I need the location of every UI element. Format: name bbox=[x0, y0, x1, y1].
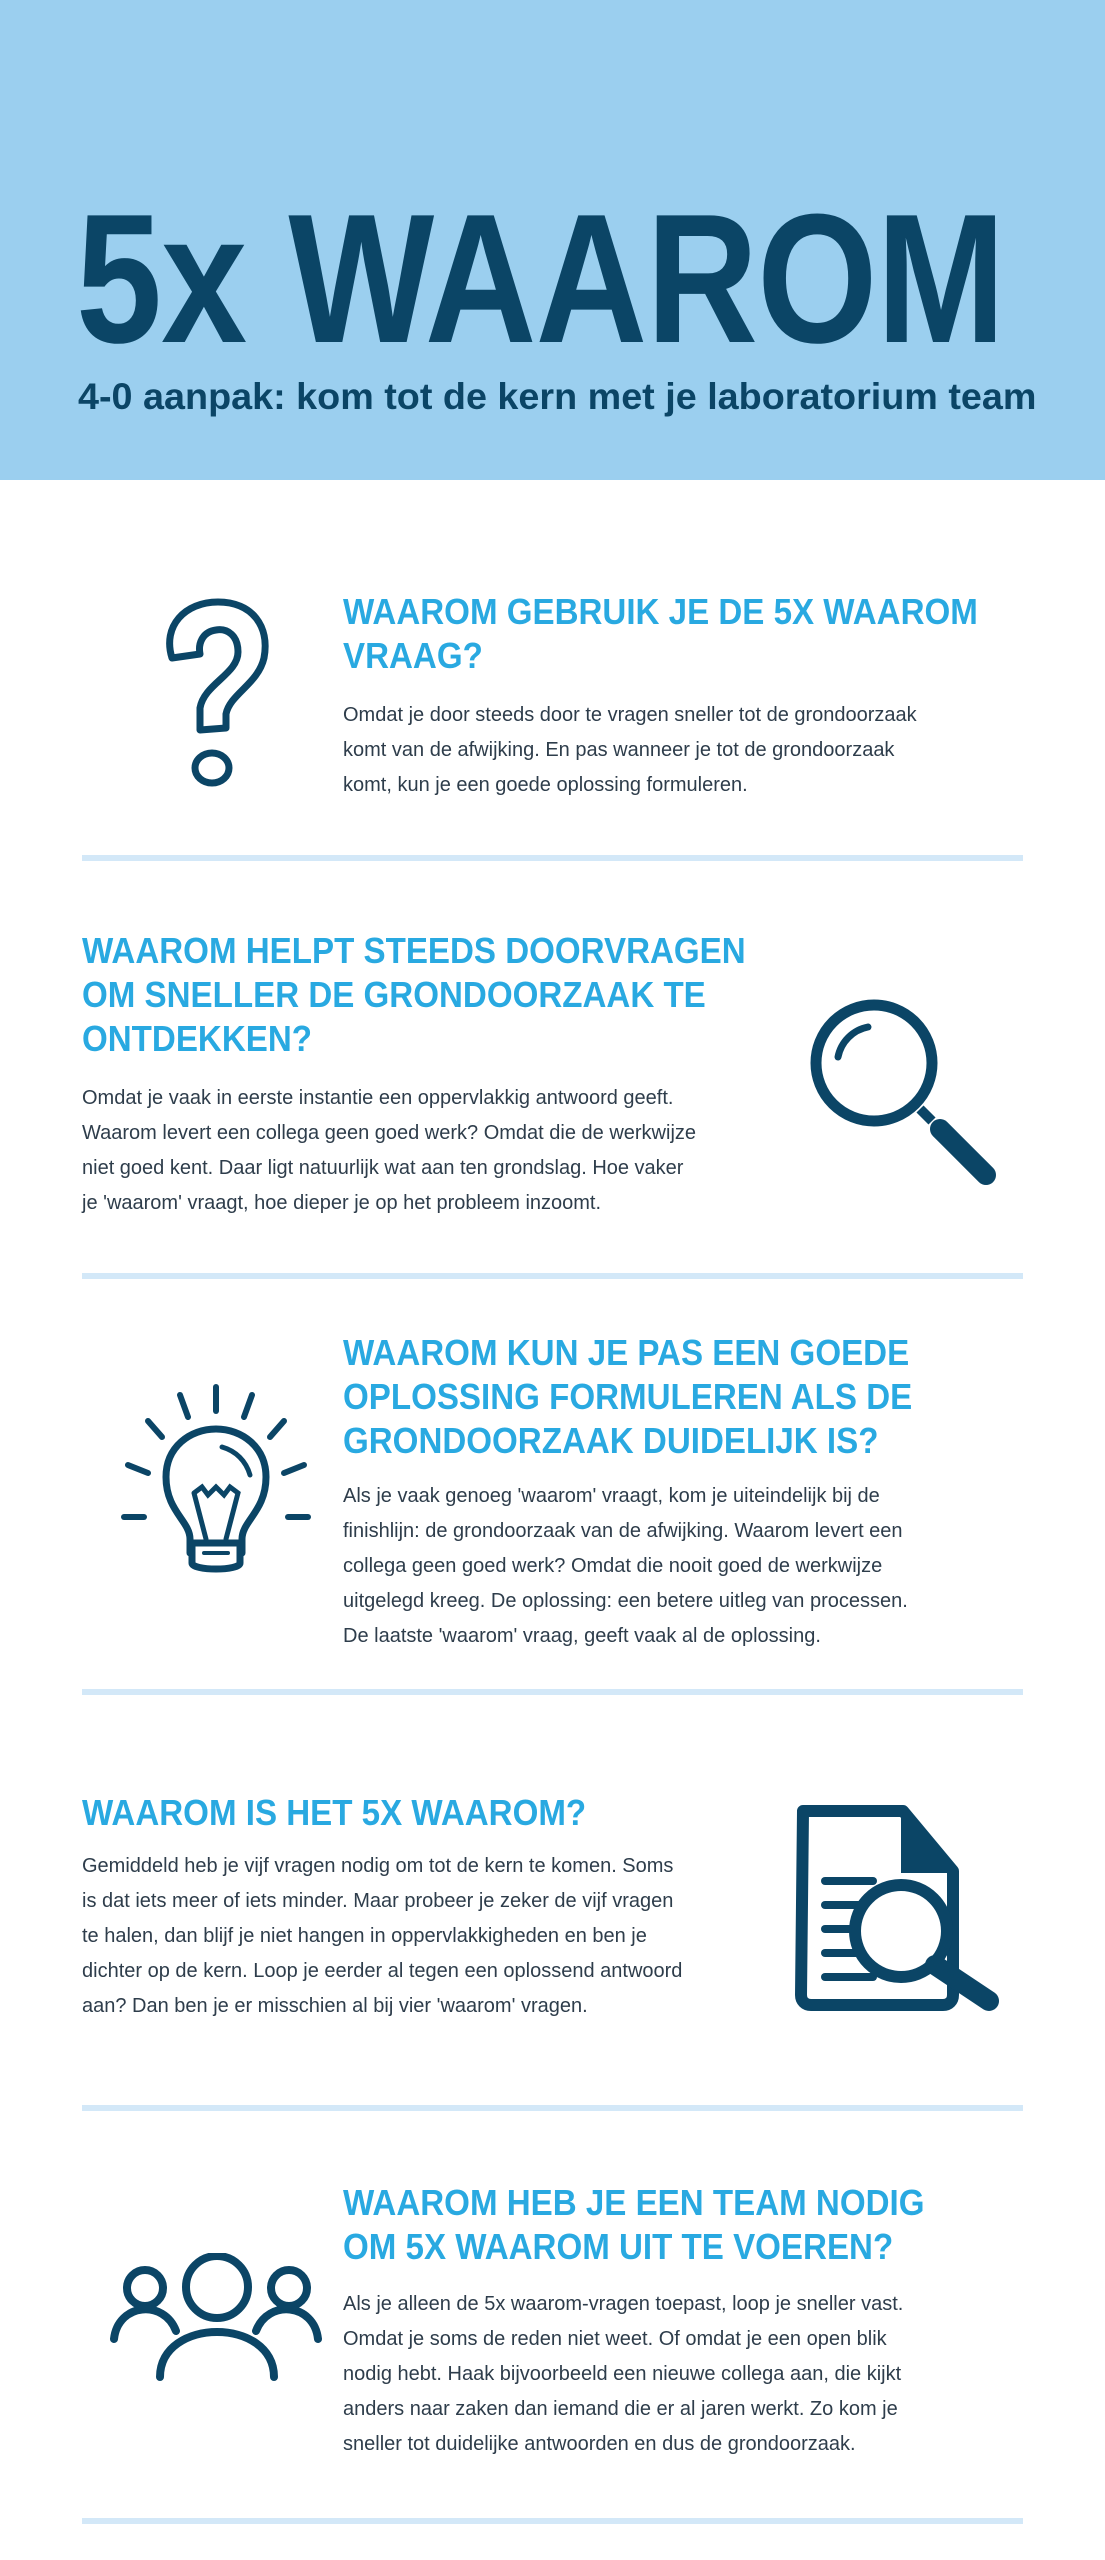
heading: VRAAG? bbox=[343, 635, 483, 676]
heading: OM 5X WAAROM UIT TE VOEREN? bbox=[343, 2226, 893, 2267]
text: Waarom levert een collega geen goed werk? Omdat die de werkwijze bbox=[82, 1122, 696, 1144]
text: dichter op de kern. Loop je eerder al tegen een oplossend antwoord bbox=[82, 1960, 682, 1982]
text bbox=[343, 704, 917, 796]
text: je 'waarom' vraagt, hoe dieper je op het probleem inzoomt. bbox=[82, 1192, 601, 1214]
heading: OPLOSSING FORMULEREN ALS DE bbox=[343, 1376, 912, 1417]
icon: team bbox=[110, 2253, 322, 2381]
heading bbox=[343, 1332, 912, 1461]
heading: WAAROM IS HET 5X WAAROM? bbox=[82, 1792, 586, 1833]
subtitle: 4-0 aanpak: kom tot de kern met je laboratorium team bbox=[78, 376, 1036, 417]
text: De laatste 'waarom' vraag, geeft vaak al de oplossing. bbox=[343, 1625, 821, 1647]
header banner bbox=[0, 0, 1105, 480]
heading bbox=[343, 2182, 924, 2267]
panel: section 4 bbox=[82, 1792, 999, 2017]
text: Omdat je door steeds door te vragen sneller tot de grondoorzaak bbox=[343, 704, 917, 726]
text: finishlijn: de grondoorzaak van de afwijking. Waarom levert een bbox=[343, 1520, 903, 1542]
text: Omdat je soms de reden niet weet. Of omdat je een open blik bbox=[343, 2328, 887, 2350]
heading: OM SNELLER DE GRONDOORZAAK TE bbox=[82, 974, 706, 1015]
icon: document with magnifier bbox=[795, 1805, 999, 2011]
icon: light bulb bbox=[121, 1384, 311, 1572]
text: komt van de afwijking. En pas wanneer je tot de grondoorzaak bbox=[343, 739, 894, 761]
panel: section 1 bbox=[166, 591, 978, 796]
heading: WAAROM HELPT STEEDS DOORVRAGEN bbox=[82, 930, 746, 971]
heading bbox=[82, 930, 746, 1059]
text: niet goed kent. Daar ligt natuurlijk wat aan ten grondslag. Hoe vaker bbox=[82, 1157, 683, 1179]
heading bbox=[343, 591, 978, 676]
icon: magnifying glass bbox=[810, 1000, 996, 1185]
text: Omdat je vaak in eerste instantie een oppervlakkig antwoord geeft. bbox=[82, 1087, 673, 1109]
panel: section 2 bbox=[82, 930, 996, 1214]
text: nodig hebt. Haak bijvoorbeeld een nieuwe collega aan, die kijkt bbox=[343, 2363, 901, 2385]
text: Als je alleen de 5x waarom-vragen toepast, loop je sneller vast. bbox=[343, 2293, 903, 2315]
title: 5x WAAROM bbox=[76, 175, 1004, 381]
text: Als je vaak genoeg 'waarom' vraagt, kom je uiteindelijk bij de bbox=[343, 1485, 880, 1507]
text: anders naar zaken dan iemand die er al jaren werkt. Zo kom je bbox=[343, 2398, 898, 2420]
text: uitgelegd kreeg. De oplossing: een betere uitleg van processen. bbox=[343, 1590, 908, 1612]
text bbox=[343, 1485, 908, 1647]
icon: question mark bbox=[166, 598, 269, 786]
heading: GRONDOORZAAK DUIDELIJK IS? bbox=[343, 1420, 878, 1461]
text: aan? Dan ben je er misschien al bij vier 'waarom' vragen. bbox=[82, 1995, 588, 2017]
text: is dat iets meer of iets minder. Maar probeer je zeker de vijf vragen bbox=[82, 1890, 673, 1912]
text: te halen, dan blijf je niet hangen in oppervlakkigheden en ben je bbox=[82, 1925, 647, 1947]
text: collega geen goed werk? Omdat die nooit goed de werkwijze bbox=[343, 1555, 882, 1577]
heading: WAAROM HEB JE EEN TEAM NODIG bbox=[343, 2182, 924, 2223]
panel: section 3 bbox=[121, 1332, 912, 1647]
text: Gemiddeld heb je vijf vragen nodig om tot de kern te komen. Soms bbox=[82, 1855, 673, 1877]
heading: WAAROM GEBRUIK JE DE 5X WAAROM bbox=[343, 591, 978, 632]
panel: section 5 bbox=[110, 2182, 924, 2455]
heading: ONTDEKKEN? bbox=[82, 1018, 312, 1059]
text bbox=[82, 1087, 696, 1214]
text: komt, kun je een goede oplossing formuleren. bbox=[343, 774, 748, 796]
text bbox=[343, 2293, 903, 2455]
text: sneller tot duidelijke antwoorden en dus de grondoorzaak. bbox=[343, 2433, 856, 2455]
heading: WAAROM KUN JE PAS EEN GOEDE bbox=[343, 1332, 909, 1373]
text bbox=[82, 1855, 682, 2017]
